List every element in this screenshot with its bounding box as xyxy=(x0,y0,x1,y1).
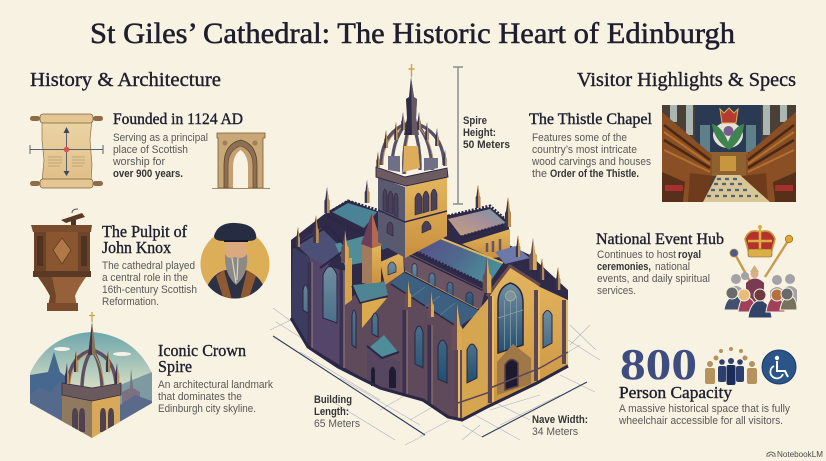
founded heading: Founded in 1124 AD xyxy=(113,111,243,128)
thistle chapel text: wood carvings and houses xyxy=(531,156,651,168)
tower xyxy=(378,177,447,258)
icon: crowd with bishop xyxy=(724,265,797,318)
label: building length: 65 Meters xyxy=(314,418,360,430)
left end roof and wall xyxy=(296,228,344,270)
great west window xyxy=(498,283,523,353)
panel: founded in 1124 xyxy=(30,111,270,188)
small transept tower xyxy=(361,213,382,285)
heading: history and architecture: History & Architecture xyxy=(30,69,221,91)
icon: wooden pulpit xyxy=(31,209,92,311)
front door xyxy=(497,344,531,395)
founded text: worship for xyxy=(112,156,165,168)
label: spire height xyxy=(463,115,510,151)
panel: national event hub xyxy=(596,225,797,318)
capacity text xyxy=(618,403,790,427)
spire height bar xyxy=(453,67,463,204)
crown spire heading: Spire xyxy=(158,357,192,376)
watermark: notebooklm: NotebookLM xyxy=(777,450,823,459)
label: building length xyxy=(314,394,360,430)
thistle chapel heading: The Thistle Chapel xyxy=(529,111,652,128)
side windows xyxy=(303,266,447,383)
panel: thistle chapel xyxy=(529,105,796,202)
capacity text: A massive historical space that is fully xyxy=(619,403,790,415)
back left roof xyxy=(332,203,377,228)
crown spire text: Edinburgh city skyline. xyxy=(158,403,256,415)
icon: royal crown xyxy=(745,225,775,257)
label: nave width: Nave Width: xyxy=(532,414,588,426)
event hub text: ceremonies, xyxy=(597,261,651,273)
founded text: over 900 years. xyxy=(113,168,183,180)
icon: thistle emblem xyxy=(712,108,744,150)
front facade xyxy=(462,266,568,420)
label: spire height: Spire xyxy=(463,115,487,127)
label: nave width: 34 Meters xyxy=(532,426,578,438)
thistle chapel text: country’s most intricate xyxy=(532,144,637,156)
corner buttresses xyxy=(457,290,565,418)
porch xyxy=(367,335,400,390)
icon: john knox portrait xyxy=(200,223,270,300)
crown spire heading xyxy=(158,341,246,376)
title: St Giles’ Cathedral: The Historic Heart of Edinburgh xyxy=(90,17,735,50)
lower blue roof xyxy=(391,272,481,327)
pulpit heading xyxy=(102,222,187,257)
pulpit text: Reformation. xyxy=(102,296,159,308)
founded text: Serving as a principal xyxy=(113,132,208,144)
back right wall xyxy=(462,229,510,258)
back right roof xyxy=(448,209,506,236)
icon: scroll with plan xyxy=(30,114,103,188)
event hub text: royal xyxy=(678,249,701,261)
purple nave roof xyxy=(413,234,503,285)
icon: crown spire skyline xyxy=(28,312,155,441)
event hub text: Continues to host xyxy=(597,249,676,261)
right end roof xyxy=(495,246,530,264)
pulpit text: 16th-century Scottish xyxy=(102,284,197,296)
teal side roof xyxy=(353,282,388,303)
thistle chapel text: Features some of the xyxy=(532,132,627,144)
label: spire height: 50 Meters xyxy=(463,139,510,151)
side wall xyxy=(345,272,462,420)
thistle chapel text: the xyxy=(532,168,547,180)
label: building length: Building xyxy=(314,394,352,406)
label: spire height: Height: xyxy=(463,127,496,139)
panel: capacity xyxy=(618,340,796,427)
founded text xyxy=(112,132,208,180)
label: nave width xyxy=(532,414,588,438)
crown spire text: An architectural landmark xyxy=(158,379,273,391)
image: chapel interior xyxy=(662,105,796,202)
crown spire text: that dominates the xyxy=(158,391,242,403)
pulpit heading: John Knox xyxy=(102,238,171,257)
founded text: place of Scottish xyxy=(113,144,188,156)
pulpit heading: The Pulpit of xyxy=(102,222,187,241)
event hub text: services. xyxy=(597,285,636,297)
crown spire xyxy=(376,64,448,186)
capacity text: wheelchair accessible for all visitors. xyxy=(618,415,783,427)
event hub text: events, and daily spiritual xyxy=(597,273,710,285)
icon: gothic arch xyxy=(212,133,270,188)
icon: wheelchair xyxy=(762,350,796,384)
pulpit text xyxy=(102,260,197,308)
upper wall windows xyxy=(388,262,473,306)
thistle chapel text xyxy=(531,132,651,180)
icon: sceptres xyxy=(730,235,793,285)
label: building length: Length: xyxy=(314,406,349,418)
crown spire text xyxy=(158,379,273,415)
pinnacles xyxy=(296,180,560,350)
front windows xyxy=(467,310,552,383)
icon: people xyxy=(705,347,757,385)
blueprint floor plan lines xyxy=(270,308,600,445)
pulpit text: The cathedral played xyxy=(102,260,195,272)
side buttresses xyxy=(310,262,430,405)
teal roof xyxy=(335,236,366,266)
crenellated lines xyxy=(292,226,345,268)
pulpit text: a central role in the xyxy=(102,272,188,284)
event hub text xyxy=(597,249,710,297)
cathedral silhouette xyxy=(291,200,568,420)
heading: visitor highlights and specs: Visitor Highlights & Specs xyxy=(577,69,796,91)
capacity number: 800 xyxy=(620,340,697,389)
crown spire heading: Iconic Crown xyxy=(158,341,246,360)
event hub heading: National Event Hub xyxy=(596,231,724,248)
capacity heading: Person Capacity xyxy=(619,383,733,402)
panel: iconic crown spire xyxy=(28,312,273,441)
ochre gables xyxy=(380,252,404,285)
thistle chapel text: Order of the Thistle. xyxy=(550,168,639,180)
illustration: cathedral xyxy=(291,64,568,420)
upper side wall xyxy=(403,250,485,312)
event hub text: national xyxy=(655,261,690,273)
panel: pulpit of john knox xyxy=(31,209,270,311)
